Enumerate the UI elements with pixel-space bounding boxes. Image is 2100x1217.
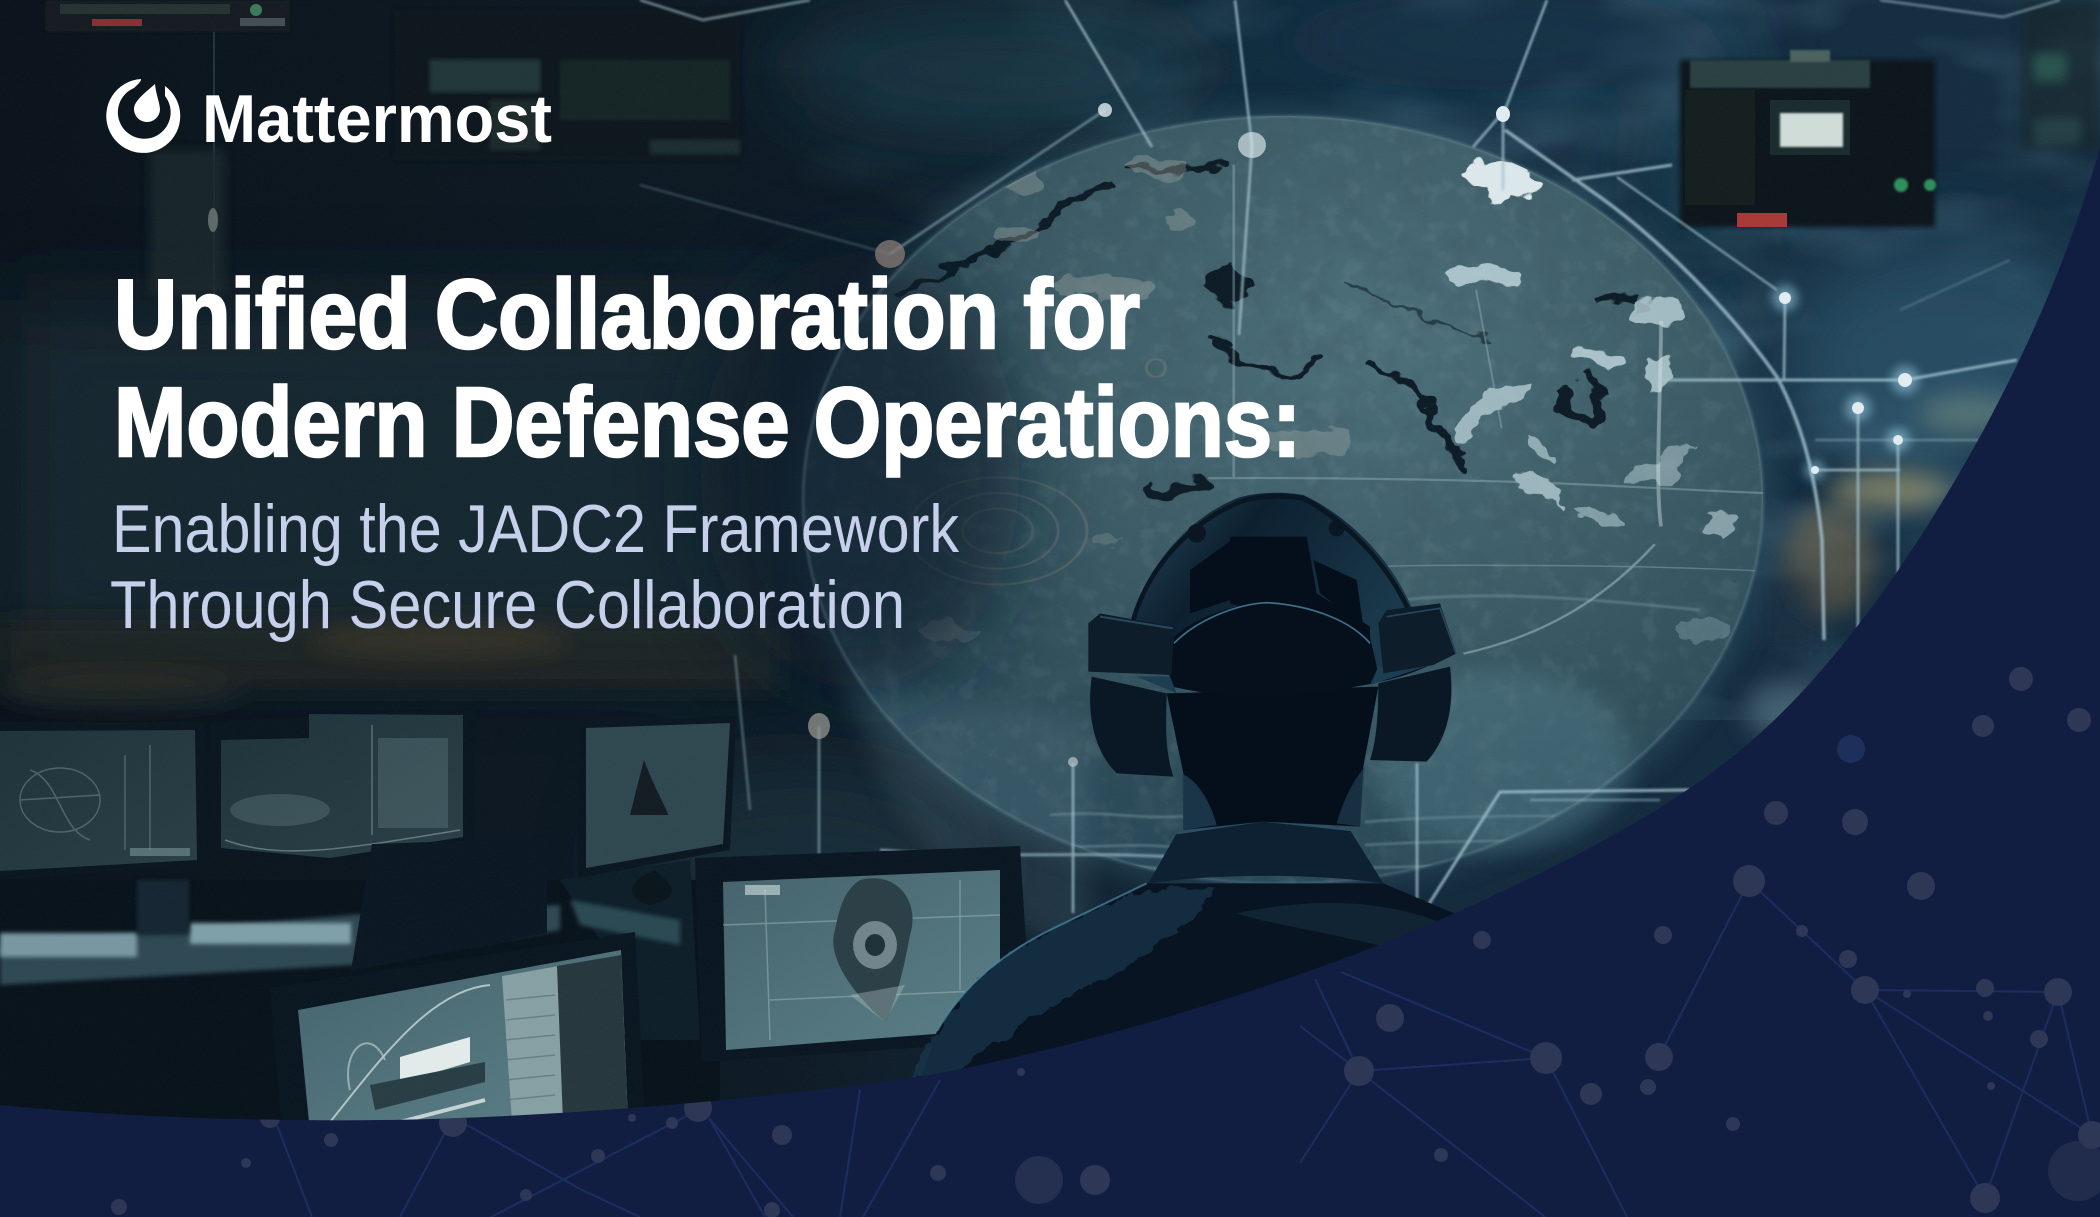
desk and room (0, 860, 720, 1120)
subtitle (110, 491, 960, 643)
monitor D front right (695, 846, 1032, 1062)
collar (1148, 820, 1383, 883)
far right green panel (2020, 0, 2100, 150)
helmet plates (1133, 496, 1410, 647)
subtitle: Enabling the JADC2 Framework (112, 491, 960, 567)
ear cups and pads (1088, 603, 1457, 777)
soldier silhouette (910, 493, 1517, 1113)
network nodes (808, 103, 1919, 767)
continents and coastlines (902, 157, 1763, 654)
mottled surface (887, 166, 1756, 884)
middle hanging panel (395, 10, 740, 160)
bright landmass patches (1447, 157, 1738, 640)
globe shading behind headline (700, 250, 1020, 690)
monitor B (210, 708, 475, 860)
monitor C (578, 716, 736, 905)
radar rings (908, 359, 1165, 584)
monitor A left (0, 722, 205, 880)
globe haze lower left (840, 680, 1090, 950)
top left hanging panel (45, 0, 290, 330)
network pattern (111, 667, 2100, 1217)
monitor E front left (270, 932, 645, 1122)
globe (700, 105, 1780, 950)
helmet brim (1137, 603, 1433, 697)
title: Unified Collaboration for (114, 259, 1140, 369)
subtitle: Through Secure Collaboration (110, 567, 905, 643)
title: Modern Defense Operations: (114, 367, 1301, 477)
grid lines (1208, 165, 1763, 654)
dark back of monitor (351, 838, 547, 971)
icon: Mattermost ring and drop (106, 79, 180, 153)
network lines over sky (640, 0, 2060, 913)
bokeh city lights (0, 395, 2020, 740)
top structures (45, 0, 2100, 330)
jacket and shoulders (910, 883, 1517, 1113)
globe rim (803, 116, 1763, 884)
lower grid lines (1050, 596, 1700, 872)
dark control panel top right (1680, 50, 1936, 227)
wordmark: Mattermost (202, 81, 552, 157)
helmet shell (1130, 493, 1417, 677)
control room monitors (0, 708, 1032, 1122)
title (114, 259, 1301, 477)
logo: Mattermost (106, 79, 552, 157)
globe haze lower right (1370, 670, 1630, 850)
neck (1167, 687, 1378, 830)
